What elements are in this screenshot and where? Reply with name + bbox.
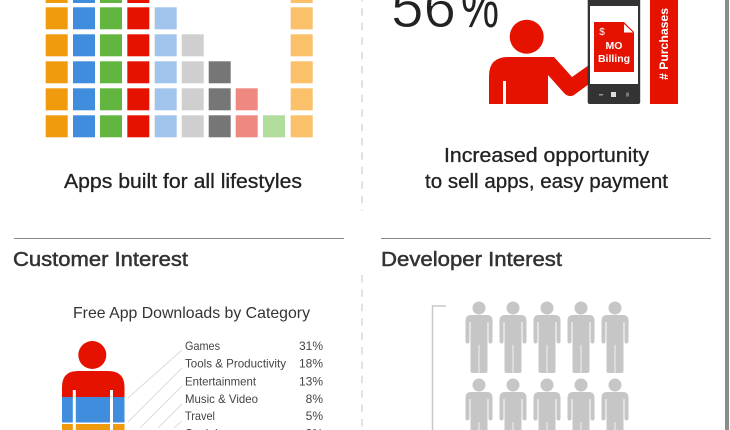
icon: phone with MO billing: $ [599,27,605,38]
category list: Games [185,339,220,353]
leader lines [128,350,182,428]
category list: 5% [306,409,323,423]
category list: Tools & Productivity [185,356,286,370]
category list: 18% [299,356,323,370]
category list: 13% [299,374,323,388]
category list [185,339,323,430]
caption: increased opportunity: Increased opportunity [444,145,649,167]
icon: phone with MO billing: MO [606,40,622,52]
bar: purchases: # Purchases [657,8,671,80]
stat: 56 percent [391,0,499,40]
icon: segmented person [62,341,124,430]
category list: Travel [185,409,215,423]
category list: Music & Video [185,392,258,406]
heading: developer interest: Developer Interest [381,249,562,271]
bracket [432,306,446,430]
chart: app lifestyle block columns [46,0,313,137]
bar: purchases [650,0,678,104]
heading: customer interest: Customer Interest [13,249,188,271]
category list: 31% [299,339,323,353]
icons: grey people grid [466,302,628,430]
icon: phone with MO billing: Billing [598,53,630,65]
chart title: free app downloads by category: Free App Downloads by Category [73,305,310,322]
caption: apps built for all lifestyles: Apps built for all lifestyles [64,171,302,193]
caption: increased opportunity: to sell apps, easy payment [425,171,668,193]
icon: red person pointing at phone [489,20,589,104]
icon: phone with MO billing [588,0,640,104]
caption: increased opportunity [425,145,668,193]
category list: 8% [306,392,323,406]
category list: Entertainment [185,374,257,388]
